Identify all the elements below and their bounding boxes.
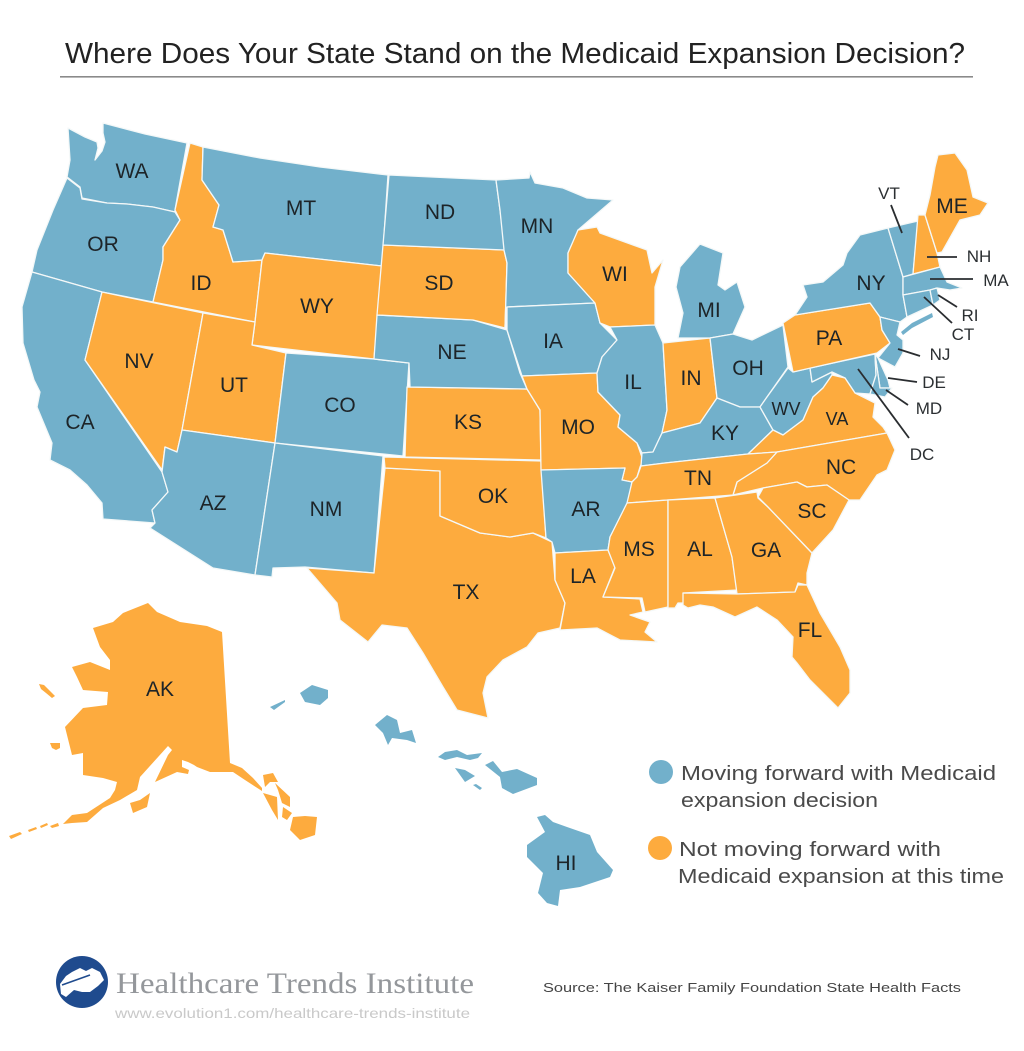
- state: Wisconsin: [568, 227, 663, 327]
- state: North Dakota: [383, 175, 505, 250]
- state: Virginia: [748, 375, 887, 454]
- source note: Source: The Kaiser Family Foundation State Health Facts: [543, 980, 962, 995]
- logo cap icon: [60, 968, 104, 997]
- St Lawrence Island: [39, 684, 55, 698]
- state: Washington: WA: [115, 160, 149, 183]
- state: Georgia: [715, 492, 812, 594]
- legend: [648, 760, 1004, 888]
- state: Iowa: IA: [543, 330, 563, 353]
- state: Massachusetts: [903, 267, 962, 295]
- callout: RI: [938, 295, 978, 325]
- state: Missouri: [522, 373, 643, 482]
- state: Mississippi: [603, 500, 668, 612]
- callout: NJ: NJ: [930, 345, 950, 364]
- logo: [56, 956, 474, 1021]
- Molokai: [438, 750, 482, 760]
- legend item: moving forward: Moving forward with Medicaid: [681, 762, 996, 785]
- title: Where Does Your State Stand on the Medicaid Expansion Decision?: [65, 38, 965, 70]
- state: Alabama: [668, 498, 737, 608]
- state: Vermont: [888, 221, 918, 277]
- state: Montana: [202, 147, 388, 266]
- state: Utah: UT: [220, 374, 248, 397]
- callout: VT: VT: [878, 184, 900, 203]
- state: Oregon: OR: [87, 233, 119, 256]
- state: West Virginia: [760, 368, 832, 435]
- Alexander Archipelago: [263, 773, 317, 840]
- state: Wyoming: [252, 253, 382, 359]
- state: New Mexico: NM: [310, 498, 342, 521]
- logo circle: [56, 956, 108, 1008]
- callout labels for northeast states: [858, 184, 1009, 464]
- state: Kansas: KS: [454, 411, 482, 434]
- callout: MD: [886, 390, 942, 418]
- state: Nevada: [85, 292, 203, 470]
- map of contiguous United States: [22, 123, 988, 718]
- state: Illinois: [597, 325, 667, 453]
- state: California: [22, 272, 168, 523]
- state: Ohio: [710, 325, 788, 407]
- state: South Dakota: [377, 245, 507, 328]
- state: Texas: [307, 468, 565, 718]
- callout: CT: CT: [952, 325, 974, 344]
- state: Kentucky: [641, 398, 773, 466]
- state: South Carolina: [758, 482, 849, 553]
- state: South Dakota: SD: [424, 272, 454, 295]
- Oahu: [375, 715, 416, 745]
- Kodiak Island: [130, 793, 150, 813]
- state: Alaska: [9, 603, 317, 840]
- state: Illinois: IL: [624, 371, 642, 394]
- state: Texas: TX: [453, 581, 479, 604]
- state: Georgia: GA: [751, 539, 781, 562]
- callout: DC: DC: [910, 445, 934, 464]
- state: Iowa: [507, 303, 617, 376]
- callout: RI: RI: [962, 306, 978, 325]
- callout: VT: [878, 184, 902, 233]
- Hawaii: [270, 685, 613, 906]
- state: California: CA: [65, 411, 95, 434]
- Aleutian chain: [9, 823, 59, 839]
- state: Wisconsin: WI: [602, 263, 628, 286]
- state: Maryland (east shore): [870, 354, 892, 397]
- Lanai: [455, 768, 475, 782]
- state: Arizona: AZ: [200, 492, 227, 515]
- Maui: [485, 761, 537, 794]
- state: Florida: [683, 585, 850, 708]
- state: Nevada: NV: [124, 350, 154, 373]
- state: Nebraska: [374, 315, 527, 389]
- state: Pennsylvania: [783, 303, 890, 372]
- Long Island: [901, 313, 933, 335]
- state: Oklahoma: [384, 457, 546, 538]
- Big Island: [527, 815, 613, 906]
- state: Rhode Island: [930, 288, 940, 305]
- state: West Virginia: WV: [772, 399, 800, 419]
- state: Alaska: AK: [146, 678, 174, 701]
- state: New York: [795, 228, 907, 322]
- state: Oklahoma: OK: [478, 485, 508, 508]
- Hawaii: HI: [556, 852, 576, 875]
- Kahoolawe: [473, 784, 482, 790]
- state: Kentucky: KY: [711, 422, 739, 445]
- state: Oregon: [32, 178, 180, 302]
- state: Florida: FL: [798, 619, 822, 642]
- callout: DE: DE: [922, 373, 946, 392]
- state: Indiana: [662, 338, 717, 433]
- legend item: moving forward: [649, 760, 996, 812]
- legend item: not moving forward: Not moving forward with: [679, 838, 941, 861]
- state: Minnesota: [496, 172, 613, 328]
- state: Pennsylvania: PA: [816, 327, 842, 350]
- state: Arkansas: [541, 468, 632, 553]
- state: Maine: ME: [936, 195, 968, 218]
- organisation name: Healthcare Trends Institute: [116, 967, 474, 1000]
- state: New Jersey: [878, 317, 903, 367]
- organisation url: www.evolution1.com/healthcare-trends-institute: [114, 1005, 470, 1021]
- state: Maine: [925, 153, 988, 253]
- state: Utah: [182, 313, 286, 443]
- Nunivak Island: [50, 743, 60, 750]
- state: Michigan: MI: [697, 299, 721, 322]
- state: Tennessee: TN: [684, 467, 712, 490]
- state: New Mexico: [255, 443, 383, 577]
- state: Colorado: [275, 353, 409, 456]
- state: Idaho: [153, 143, 262, 322]
- state: North Carolina: [733, 433, 895, 500]
- state: Virginia: VA: [826, 409, 848, 429]
- state: Tennessee: [627, 452, 777, 503]
- callout: DE: [888, 373, 946, 392]
- state: Idaho: ID: [190, 272, 212, 295]
- callout: MD: MD: [916, 399, 942, 418]
- state: Connecticut: [903, 290, 933, 317]
- title underline: [60, 76, 973, 78]
- callout: MA: [930, 271, 1009, 290]
- Kauai: [300, 685, 328, 705]
- state: Ohio: OH: [732, 357, 764, 380]
- state: North Dakota: ND: [425, 201, 455, 224]
- state: Wyoming: WY: [300, 295, 334, 318]
- callout: NH: NH: [967, 247, 991, 266]
- state: Louisiana: [555, 550, 657, 642]
- state: Arizona: [150, 430, 275, 575]
- state: Indiana: IN: [680, 367, 702, 390]
- legend item: not moving forward: Medicaid expansion at this time: [678, 865, 1004, 888]
- state: Kansas: [405, 387, 541, 460]
- callout: MA: MA: [983, 271, 1009, 290]
- Niihau: [270, 700, 285, 710]
- state: Washington: [67, 123, 187, 212]
- state: Missouri: MO: [561, 416, 595, 439]
- state: Alabama: AL: [687, 538, 713, 561]
- callout: NJ: [898, 345, 950, 364]
- state: Montana: MT: [286, 197, 316, 220]
- legend item: not moving forward: [648, 836, 1004, 888]
- state: Michigan: [676, 244, 745, 338]
- state: South Carolina: SC: [797, 500, 827, 523]
- legend item: moving forward: expansion decision: [681, 789, 878, 812]
- callout: NH: [927, 247, 991, 266]
- state: Minnesota: MN: [521, 215, 553, 238]
- state: Louisiana: LA: [570, 565, 596, 588]
- state: North Carolina: NC: [826, 456, 856, 479]
- state: New York: NY: [856, 272, 886, 295]
- state: Colorado: CO: [324, 394, 356, 417]
- state: New Hampshire: [913, 215, 940, 274]
- state: Mississippi: MS: [623, 538, 655, 561]
- state: Arkansas: AR: [571, 498, 601, 521]
- state: Nebraska: NE: [437, 341, 467, 364]
- state: Delaware: [875, 354, 890, 388]
- state: Maryland (west): [810, 354, 876, 394]
- callout: CT: [924, 297, 974, 344]
- callout: DC: [858, 369, 934, 464]
